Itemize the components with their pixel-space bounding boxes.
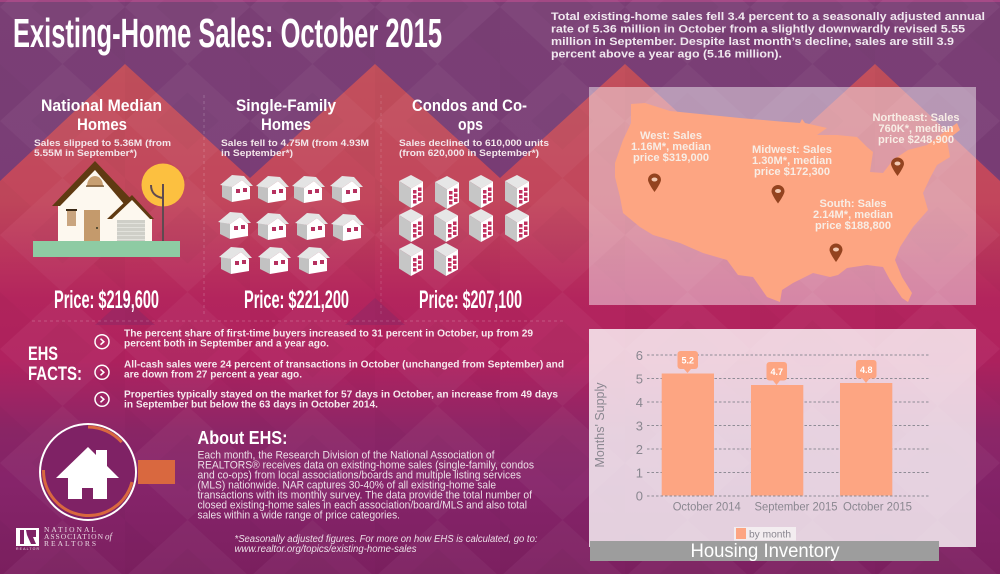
map label: midwest: price $172,300 — [754, 166, 830, 178]
icon: grid of houses — [218, 175, 364, 274]
footnote: www.realtor.org/topics/existing-home-sales — [234, 544, 416, 555]
heading: EHS facts: FACTS: — [28, 364, 82, 385]
sales text: in September*) — [221, 148, 293, 159]
map label: northeast: Northeast: Sales — [872, 112, 960, 124]
bar chart: 1 — [636, 466, 643, 480]
data label 5.2: 5.2 — [681, 356, 694, 366]
intro text: rate of 5.36 million in October from a slightly downwardly revised 5.55 — [551, 24, 965, 36]
legend — [734, 527, 796, 540]
map label: south: price $188,800 — [815, 220, 891, 232]
map label: south — [813, 198, 893, 232]
fact 3 — [124, 389, 558, 410]
sales text — [399, 138, 549, 159]
heading: national median homes: National Median — [41, 96, 162, 115]
fact 2: All-cash sales were 24 percent of transactions in October (unchanged from September) and — [124, 359, 564, 370]
about text: Each month, the Research Division of the National Association of — [198, 449, 495, 461]
icon: chevron bullet 1 — [95, 335, 109, 349]
map label: west: price $319,000 — [633, 152, 709, 164]
price: Price: $221,200 — [244, 286, 349, 314]
heading: single-family homes: Homes — [261, 115, 311, 134]
icon: grid of condo buildings — [399, 175, 529, 276]
panel: national median homes — [33, 96, 184, 314]
bar chart: 6 — [636, 348, 643, 363]
fact 3: Properties typically stayed on the market for 57 days in October, an increase from 49 days — [124, 389, 558, 400]
intro text: percent above a year ago (5.16 million). — [551, 48, 782, 60]
sales text — [34, 138, 171, 159]
legend: by month — [749, 530, 791, 540]
intro text: million in September. Despite last month’s decline, sales are still 3.9 — [551, 36, 954, 48]
map label: west — [631, 130, 711, 164]
map label: midwest — [752, 144, 832, 178]
chart title bar: Housing Inventory — [690, 541, 840, 562]
heading: national median homes: Homes — [77, 115, 127, 134]
map label: northeast: price $248,900 — [878, 134, 954, 146]
bar chart: 3 — [636, 418, 643, 434]
data label 4.8 — [856, 360, 876, 383]
sales text: (from 620,000 in September*) — [399, 148, 539, 159]
price: Price: $219,600 — [54, 286, 159, 314]
logo: national association of realtors: REALTOR — [16, 547, 39, 551]
icon: house with tree — [33, 161, 184, 257]
map label: south: South: Sales — [820, 198, 886, 210]
bar chart: October 2014 — [673, 502, 741, 514]
data label 4.7 — [766, 362, 787, 385]
panel: housing inventory chart — [589, 329, 976, 562]
panel: EHS facts — [28, 329, 564, 410]
map label: northeast: 760K*, median — [878, 123, 954, 135]
about text: and co-ops) from local associations/boards and multiple listing services — [198, 469, 521, 481]
heading: national median homes — [41, 96, 162, 134]
heading: EHS facts — [28, 344, 82, 385]
icon: chevron bullet 2 — [95, 365, 109, 379]
map pin: northeast — [891, 158, 904, 176]
fact 2: are down from 27 percent a year ago. — [124, 369, 302, 380]
bar chart: September 2015 — [754, 502, 838, 514]
icon: home in circle — [40, 424, 175, 520]
fact 1: The percent share of first-time buyers increased to 31 percent in October, up from 29 — [124, 329, 533, 340]
heading: condos and co-ops: Condos and Co- — [412, 96, 527, 115]
about text — [198, 449, 534, 522]
sales text: Sales declined to 610,000 units — [399, 138, 549, 149]
sales text: Sales slipped to 5.36M (from — [34, 138, 171, 149]
panel: single-family homes — [218, 96, 369, 314]
logo: national association of realtors: of — [105, 532, 114, 542]
about text: (MLS) nationwide. NAR captures 30-40% of all existing-home sale — [198, 480, 496, 492]
logo: national association of realtors: ASSOCIATION — [44, 532, 104, 541]
heading: about EHS: About EHS: — [198, 428, 288, 448]
map pin: midwest — [772, 185, 784, 204]
logo: national association of realtors: REALTORS — [44, 539, 96, 548]
about text: transactions with its monthly survey. The data provide the total number of — [198, 490, 532, 502]
heading: single-family homes — [236, 96, 336, 134]
fact 2 — [124, 359, 564, 380]
chart title bar — [590, 541, 939, 562]
bar chart: 2 — [636, 442, 643, 457]
bar chart: 0 — [636, 488, 643, 504]
logo: national association of realtors: NATIONAL — [44, 525, 96, 534]
sales text: 5.55M in September*) — [34, 148, 137, 159]
footnote — [234, 534, 538, 555]
panel: regional map — [589, 87, 976, 305]
sales text — [221, 138, 369, 159]
fact 1 — [124, 329, 533, 350]
bar chart: 4 — [636, 395, 643, 410]
map pin: south — [830, 244, 842, 262]
about text: closed existing-home sales in each association/board/MLS and also total — [198, 500, 527, 512]
about text: sales within a wide range of price categories. — [198, 510, 400, 522]
intro text: Total existing-home sales fell 3.4 percent to a seasonally adjusted annual — [551, 11, 985, 23]
bar chart — [593, 348, 929, 514]
intro text — [551, 11, 985, 60]
logo: national association of realtors — [16, 525, 114, 551]
map pin: west — [648, 174, 661, 192]
data label 4.8: 4.8 — [860, 365, 872, 375]
map label: south: 2.14M*, median — [813, 209, 893, 221]
map label: midwest: 1.30M*, median — [752, 155, 832, 167]
about EHS — [198, 428, 538, 555]
sales text: Sales fell to 4.75M (from 4.93M — [221, 138, 369, 149]
heading: condos and co-ops — [412, 96, 527, 134]
title: Existing-Home Sales: October 2015 — [13, 10, 442, 56]
map label: northeast — [872, 112, 960, 146]
map label: west: 1.16M*, median — [631, 141, 711, 153]
panel: condos and co-ops — [399, 96, 549, 314]
heading: single-family homes: Single-Family — [236, 96, 336, 115]
bar chart: October 2015 — [843, 502, 912, 514]
data label 4.7: 4.7 — [770, 367, 783, 377]
footnote: *Seasonally adjusted figures. For more on how EHS is calculated, go to: — [234, 534, 538, 545]
price: Price: $207,100 — [419, 286, 522, 314]
heading: EHS facts: EHS — [28, 344, 58, 365]
fact 1: percent both in September and a year ago. — [124, 339, 329, 350]
map label: midwest: Midwest: Sales — [752, 144, 832, 156]
bar chart: 5 — [636, 372, 643, 386]
data label 5.2 — [678, 351, 698, 373]
fact 3: in September but below the 63 days in October 2014. — [124, 399, 378, 410]
map label: west: West: Sales — [640, 130, 702, 142]
bar chart: Months' Supply — [593, 382, 607, 468]
heading: condos and co-ops: ops — [458, 115, 483, 134]
about text: REALTORS® receives data on existing-home sales (single-family, condos — [198, 459, 534, 471]
icon: chevron bullet 3 — [95, 392, 109, 406]
map of United States — [615, 103, 960, 302]
